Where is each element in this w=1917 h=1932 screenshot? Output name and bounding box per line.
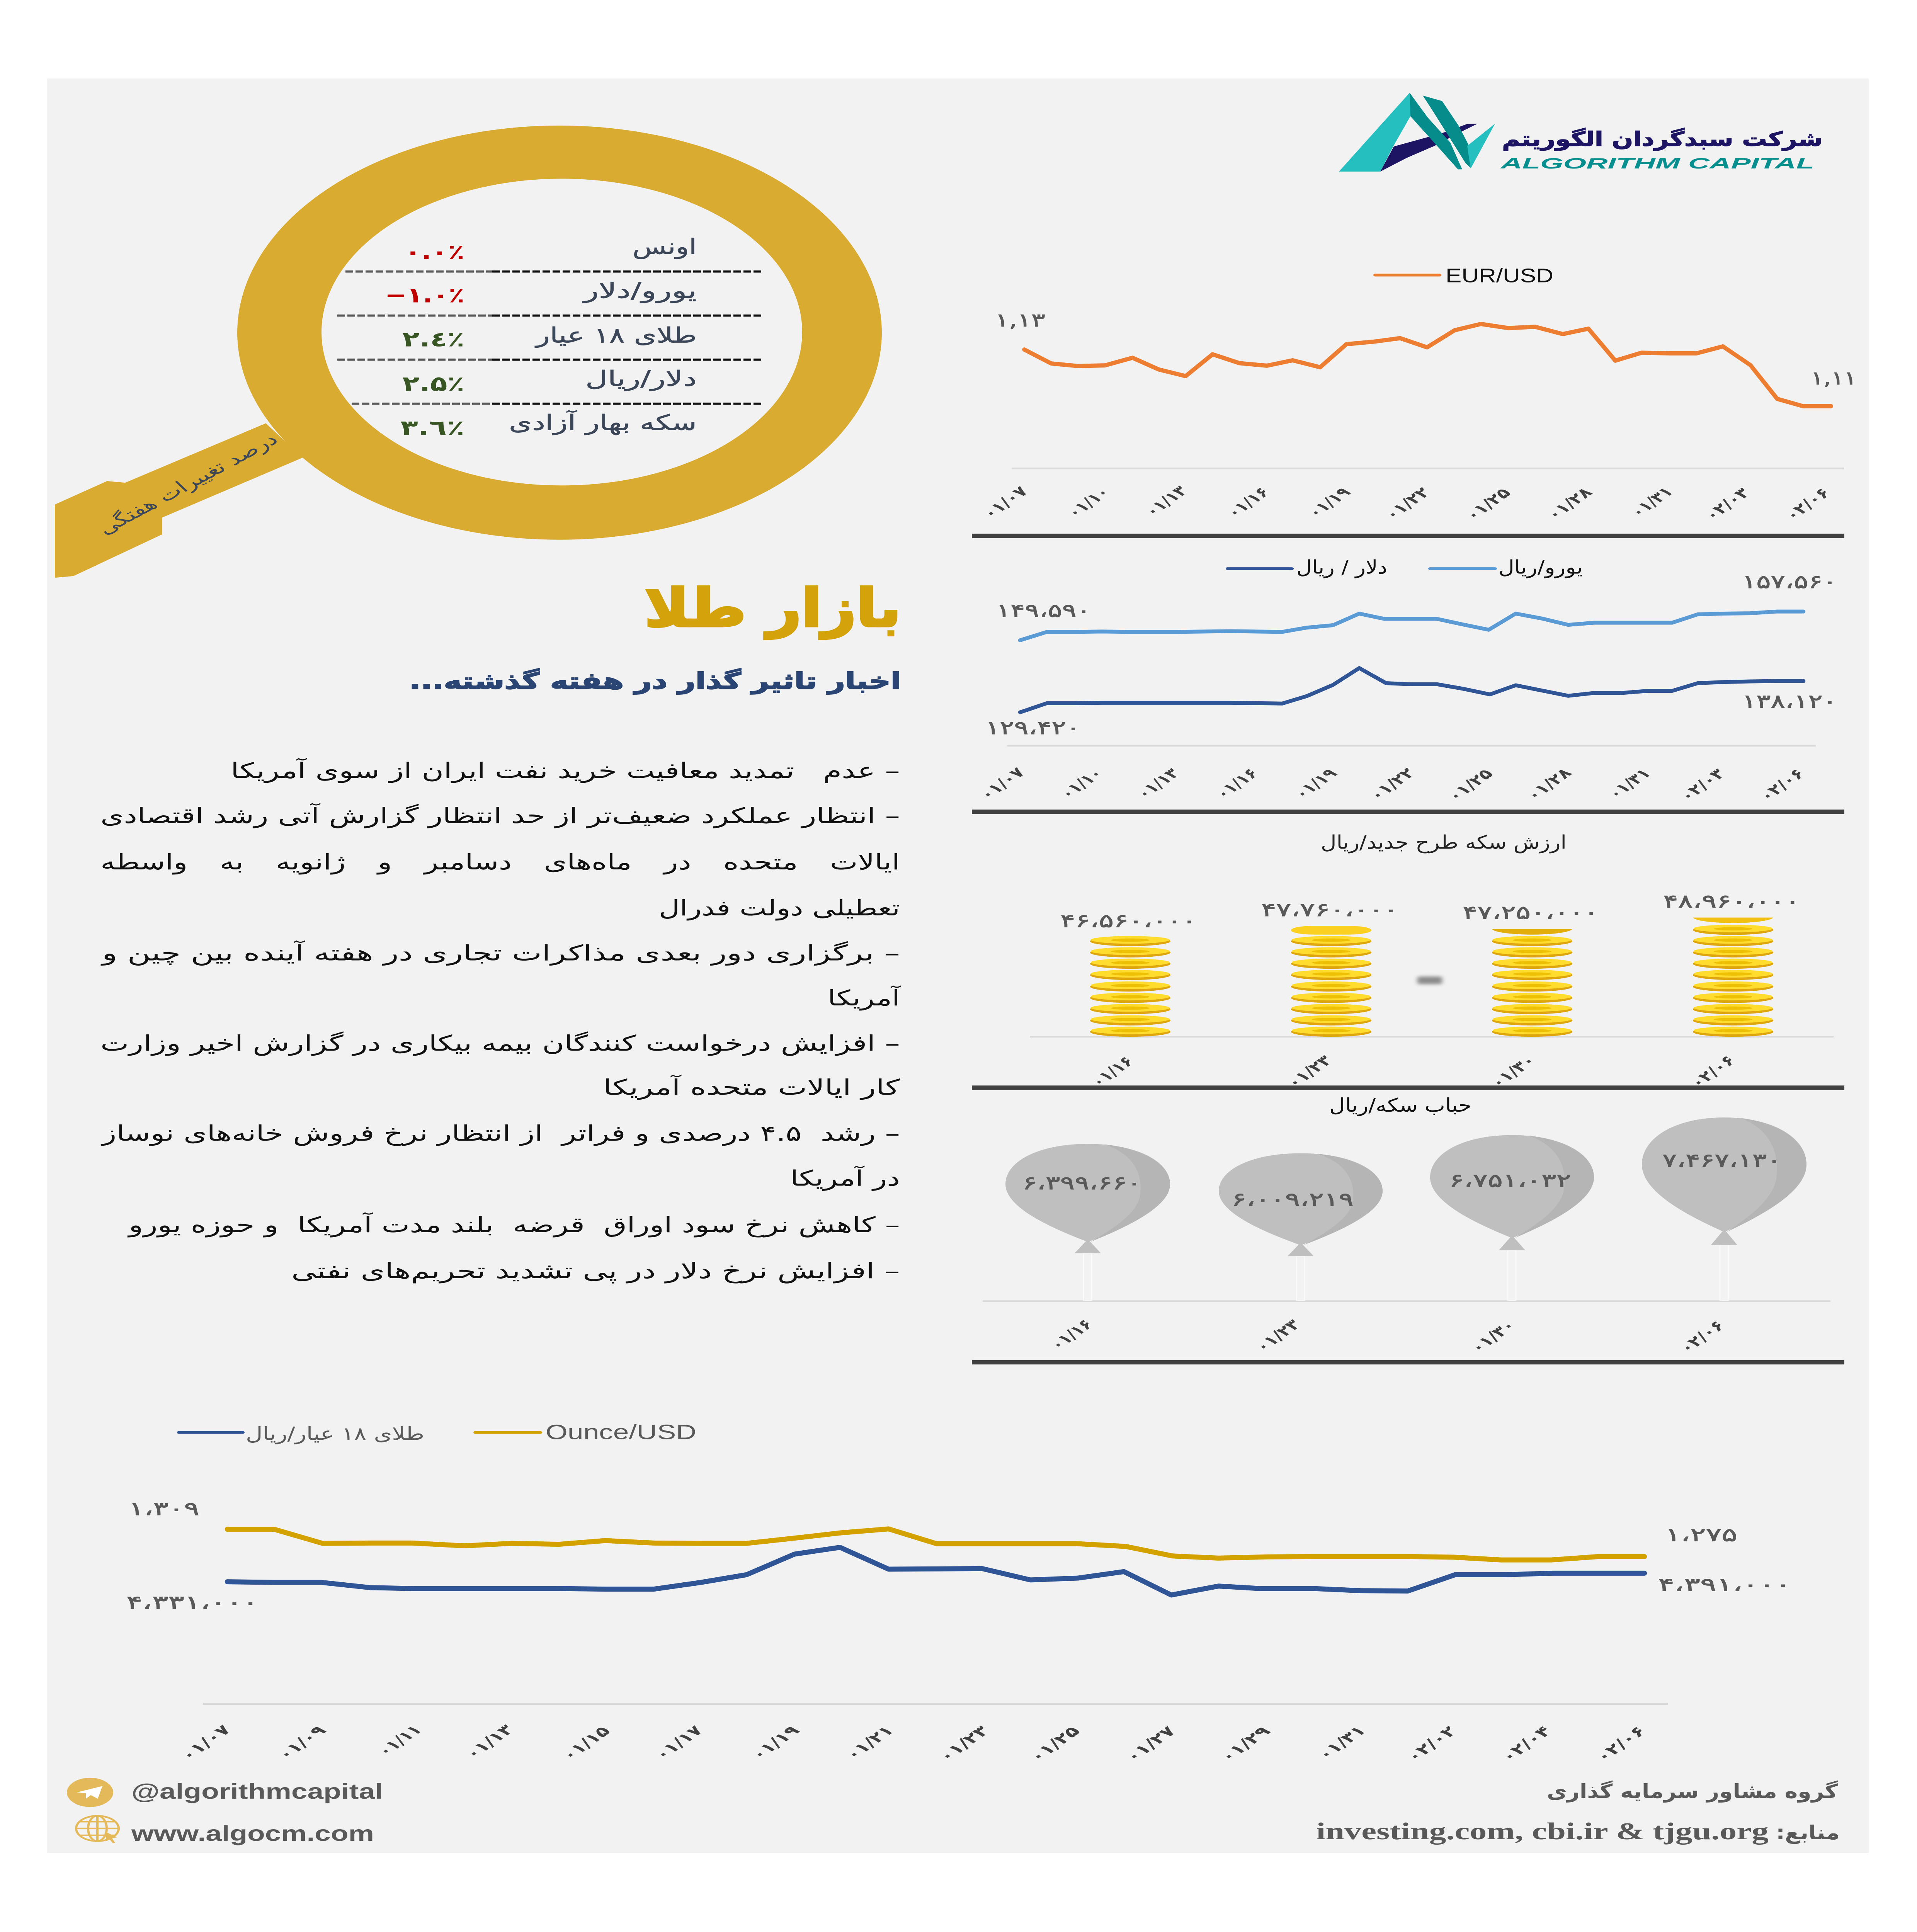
end value: ۱,۱۱ [1811, 367, 1857, 389]
news text block: – برگزاری دور بعدی مذاکرات تجاری در هفته آینده بین چین و [100, 940, 900, 966]
logo mark [1339, 93, 1495, 172]
date axis: ۰۱/۱۶ [1046, 1316, 1097, 1353]
footer: sources: منابع: [1776, 1822, 1840, 1844]
chart: dollar and euro in rial [975, 556, 1837, 804]
footer: telegram handle: @algorithmcapital [131, 1780, 383, 1803]
start value: ۱,۱۳ [995, 309, 1045, 331]
coin stack 3 [1492, 929, 1572, 1037]
balloon 1: ۶،۳۹۹،۶۶۰ [1022, 1172, 1141, 1194]
date axis: ۰۱/۲۷ [1121, 1723, 1180, 1765]
row: bahar azadi coin: سکه بهار آزادی [509, 410, 697, 435]
date axis: ۰۱/۲۸ [1543, 485, 1597, 523]
date axis [978, 483, 1835, 524]
row: gold 18 carat: ۲.٤٪ [402, 327, 464, 352]
gold end value: ۴،۳۹۱،۰۰۰ [1658, 1574, 1791, 1595]
date axis: ۰۱/۱۶ [1087, 1053, 1138, 1090]
legend [1228, 556, 1583, 578]
euro series [1020, 612, 1803, 640]
date axis: ۰۲/۰۳ [1700, 485, 1754, 524]
row: dollar rial: ۲.۵٪ [402, 371, 464, 396]
date axis: ۰۱/۱۳ [461, 1722, 518, 1762]
news text block: در آمریکا [790, 1165, 900, 1191]
date axis: ۰۱/۱۵ [558, 1723, 614, 1764]
row: euro dollar [385, 278, 697, 308]
news text block: ایالات متحده در ماه‌های دسامبر و ژانویه به واسطه [100, 849, 900, 875]
footer: sources: investing.com, cbi.ir & tjgu.org [1316, 1818, 1769, 1845]
news text block: – رشد ۴.۵ درصدی و فراتر از انتظار نرخ فروش خانه‌های نوساز [101, 1121, 900, 1146]
subtitle: اخبار تاثیر گذار در هفته گذشته... [409, 668, 901, 694]
magnifier handle [55, 423, 303, 578]
date axis: ۰۱/۰۷ [176, 1722, 235, 1764]
date axis: ۰۱/۱۶ [1211, 765, 1262, 802]
date axis: ۰۱/۱۱ [374, 1722, 426, 1759]
date axis: ۰۱/۲۳ [934, 1723, 993, 1765]
date axis: ۰۱/۲۲ [1365, 765, 1419, 803]
balloon 3: ۶،۷۵۱،۰۳۲ [1449, 1169, 1571, 1191]
chart: new design coin value [1030, 831, 1834, 1091]
legend: EUR/USD [1446, 265, 1553, 287]
date axis: ۰۱/۱۷ [650, 1723, 707, 1763]
panel: weekly change magnifier [55, 126, 882, 578]
row: gold 18 carat [402, 323, 697, 352]
date axis: ۰۱/۱۰ [1063, 484, 1114, 521]
date axis: ۰۱/۱۳ [1133, 765, 1184, 802]
euro end value: ۱۵۷،۵۶۰ [1742, 571, 1837, 593]
chart: gold 18 carat and ounce [126, 1420, 1791, 1765]
news text block: آمریکا [828, 985, 902, 1011]
date axis: ۰۱/۲۹ [1216, 1723, 1275, 1765]
date axis [975, 764, 1809, 804]
date axis: ۰۱/۱۶ [1223, 484, 1274, 521]
row: gold 18 carat: طلای ۱۸ عیار [535, 323, 697, 348]
news text block: – افزایش نرخ دلار در پی تشدید تحریم‌های نفتی [291, 1258, 900, 1284]
news text block: تعطیلی دولت فدرال [659, 895, 900, 921]
row: ounce: اونس [633, 234, 697, 259]
date axis [1046, 1316, 1729, 1356]
chart: EUR/USD line [978, 265, 1857, 524]
gold start value: ۴،۳۳۱،۰۰۰ [126, 1591, 259, 1613]
coin values [1060, 890, 1800, 932]
row: dollar rial: دلار/ریال [585, 366, 697, 391]
news text block: – کاهش نرخ سود اوراق قرضه بلند مدت آمریکا و حوزه یورو [128, 1212, 900, 1238]
chart: coin bubble balloons [983, 1094, 1830, 1356]
date axis: ۰۱/۱۰ [1056, 765, 1107, 802]
date axis: ۰۱/۲۱ [841, 1723, 898, 1763]
date axis [176, 1722, 1650, 1765]
date axis: ۰۲/۰۶ [1591, 1723, 1650, 1765]
table dividers [337, 272, 761, 404]
row: ounce: ۰.۰٪ [405, 240, 464, 264]
row: euro dollar: −۱.۰٪ [385, 283, 464, 308]
date axis: ۰۲/۰۳ [1675, 766, 1730, 804]
row: bahar azadi coin: ۳.٦٪ [400, 415, 464, 440]
coin stack 1 [1090, 936, 1170, 1037]
date axis: ۰۱/۳۰ [1466, 1317, 1520, 1356]
coin values: ۴۷،۷۶۰،۰۰۰ [1261, 899, 1398, 920]
dollar start value: ۱۲۹،۴۲۰ [985, 717, 1080, 738]
balloon 3 [1430, 1135, 1594, 1300]
divider bar three [972, 1085, 1844, 1090]
date axis: ۰۱/۰۷ [975, 764, 1029, 803]
coin values: ۴۷،۲۵۰،۰۰۰ [1463, 901, 1599, 923]
balloon 4 [1642, 1117, 1806, 1300]
news text block: – افزایش درخواست کنندگان بیمه بیکاری در گزارش اخیر وزارت [100, 1031, 900, 1056]
icon: telegram [67, 1778, 113, 1807]
chart title: ارزش سکه طرح جدید/ریال [1321, 831, 1567, 854]
title: بازار طلا [645, 578, 901, 639]
euro start value: ۱۴۹،۵۹۰ [996, 599, 1091, 621]
gold series [227, 1548, 1645, 1595]
date axis: ۰۱/۲۸ [1522, 765, 1576, 803]
date axis: ۰۱/۱۳ [1141, 483, 1192, 519]
date axis: ۰۲/۰۶ [1755, 766, 1809, 804]
ounce start value: ۱،۳۰۹ [129, 1498, 199, 1520]
blurred mark [1417, 976, 1442, 984]
date axis: ۰۱/۱۹ [1304, 484, 1355, 521]
row: euro dollar: یورو/دلار [582, 278, 697, 303]
magnifier ring [237, 126, 882, 540]
date axis: ۰۱/۲۳ [1283, 1053, 1337, 1091]
coin values: ۴۸،۹۶۰،۰۰۰ [1663, 890, 1800, 912]
handle caption: درصد تغییرات هفتگی [92, 430, 283, 538]
balloon 2: ۶،۰۰۹،۲۱۹ [1232, 1189, 1354, 1210]
legend: طلای ۱۸ عیار/ریال [246, 1423, 424, 1444]
date axis: ۰۱/۳۰ [1486, 1053, 1540, 1091]
date axis: ۰۱/۲۳ [1251, 1316, 1305, 1355]
news text block: – انتظار عملکرد ضعیف‌تر از حد انتظار گزارش آتی رشد اقتصادی [100, 803, 900, 828]
coin stack 2 [1291, 926, 1371, 1037]
date axis: ۰۲/۰۶ [1781, 485, 1835, 524]
date axis: ۰۲/۰۴ [1497, 1723, 1556, 1765]
date axis: ۰۲/۰۲ [1402, 1723, 1461, 1765]
date axis: ۰۱/۱۹ [1290, 765, 1341, 802]
dollar series [1020, 668, 1803, 712]
footer: telegram handle [67, 1778, 383, 1807]
company name persian: شرکت سبدگردان الگوریتم [1502, 128, 1823, 151]
date axis: ۰۲/۰۶ [1675, 1318, 1729, 1356]
footer: website: www.algocm.com [131, 1822, 374, 1845]
date axis: ۰۱/۰۹ [274, 1723, 330, 1763]
date axis: ۰۱/۲۵ [1461, 485, 1515, 524]
EUR/USD series [1024, 324, 1831, 406]
chart title: حباب سکه/ریال [1329, 1094, 1472, 1116]
news text block: کار ایالات متحده آمریکا [603, 1074, 900, 1100]
row: ounce [405, 234, 697, 264]
row: bahar azadi coin [400, 410, 697, 440]
row: dollar rial [402, 366, 697, 396]
date axis [1087, 1053, 1740, 1091]
icon: globe with cursor [76, 1816, 119, 1844]
coin stack 4 [1693, 918, 1773, 1037]
footer: website [76, 1816, 374, 1845]
legend [179, 1420, 696, 1444]
date axis: ۰۱/۳۱ [1626, 484, 1677, 520]
date axis: ۰۱/۳۱ [1604, 765, 1655, 802]
divider bar one [972, 534, 1844, 538]
company name latin: ALGORITHM CAPITAL [1500, 155, 1814, 172]
balloon 4: ۷،۴۶۷،۱۳۰ [1662, 1149, 1781, 1171]
date axis: ۰۲/۰۶ [1686, 1053, 1740, 1091]
ounce series [227, 1529, 1645, 1560]
date axis: ۰۱/۰۷ [978, 483, 1032, 522]
news text block [100, 758, 902, 1284]
legend: یورو/ریال [1499, 556, 1583, 578]
legend: Ounce/USD [546, 1420, 696, 1444]
dollar end value: ۱۳۸،۱۲۰ [1742, 690, 1837, 712]
ounce end value: ۱،۲۷۵ [1665, 1524, 1737, 1546]
coin values: ۴۶،۵۶۰،۰۰۰ [1060, 910, 1197, 932]
news text block: – عدم تمدید معافیت خرید نفت ایران از سوی آمریکا [231, 758, 900, 783]
balloon 2 [1219, 1153, 1383, 1300]
balloon 1 [1005, 1144, 1170, 1300]
date axis: ۰۱/۳۱ [1313, 1723, 1370, 1763]
logo [1339, 93, 1823, 172]
divider bar four [972, 1360, 1844, 1364]
legend: دلار / ریال [1296, 556, 1387, 578]
footer: advisory group: گروه مشاور سرمایه گذاری [1547, 1780, 1838, 1803]
date axis: ۰۱/۲۲ [1380, 485, 1434, 523]
date axis: ۰۱/۲۵ [1443, 766, 1497, 804]
date axis: ۰۱/۱۹ [747, 1723, 804, 1763]
date axis: ۰۱/۲۵ [1025, 1723, 1084, 1765]
divider bar two [972, 810, 1844, 814]
